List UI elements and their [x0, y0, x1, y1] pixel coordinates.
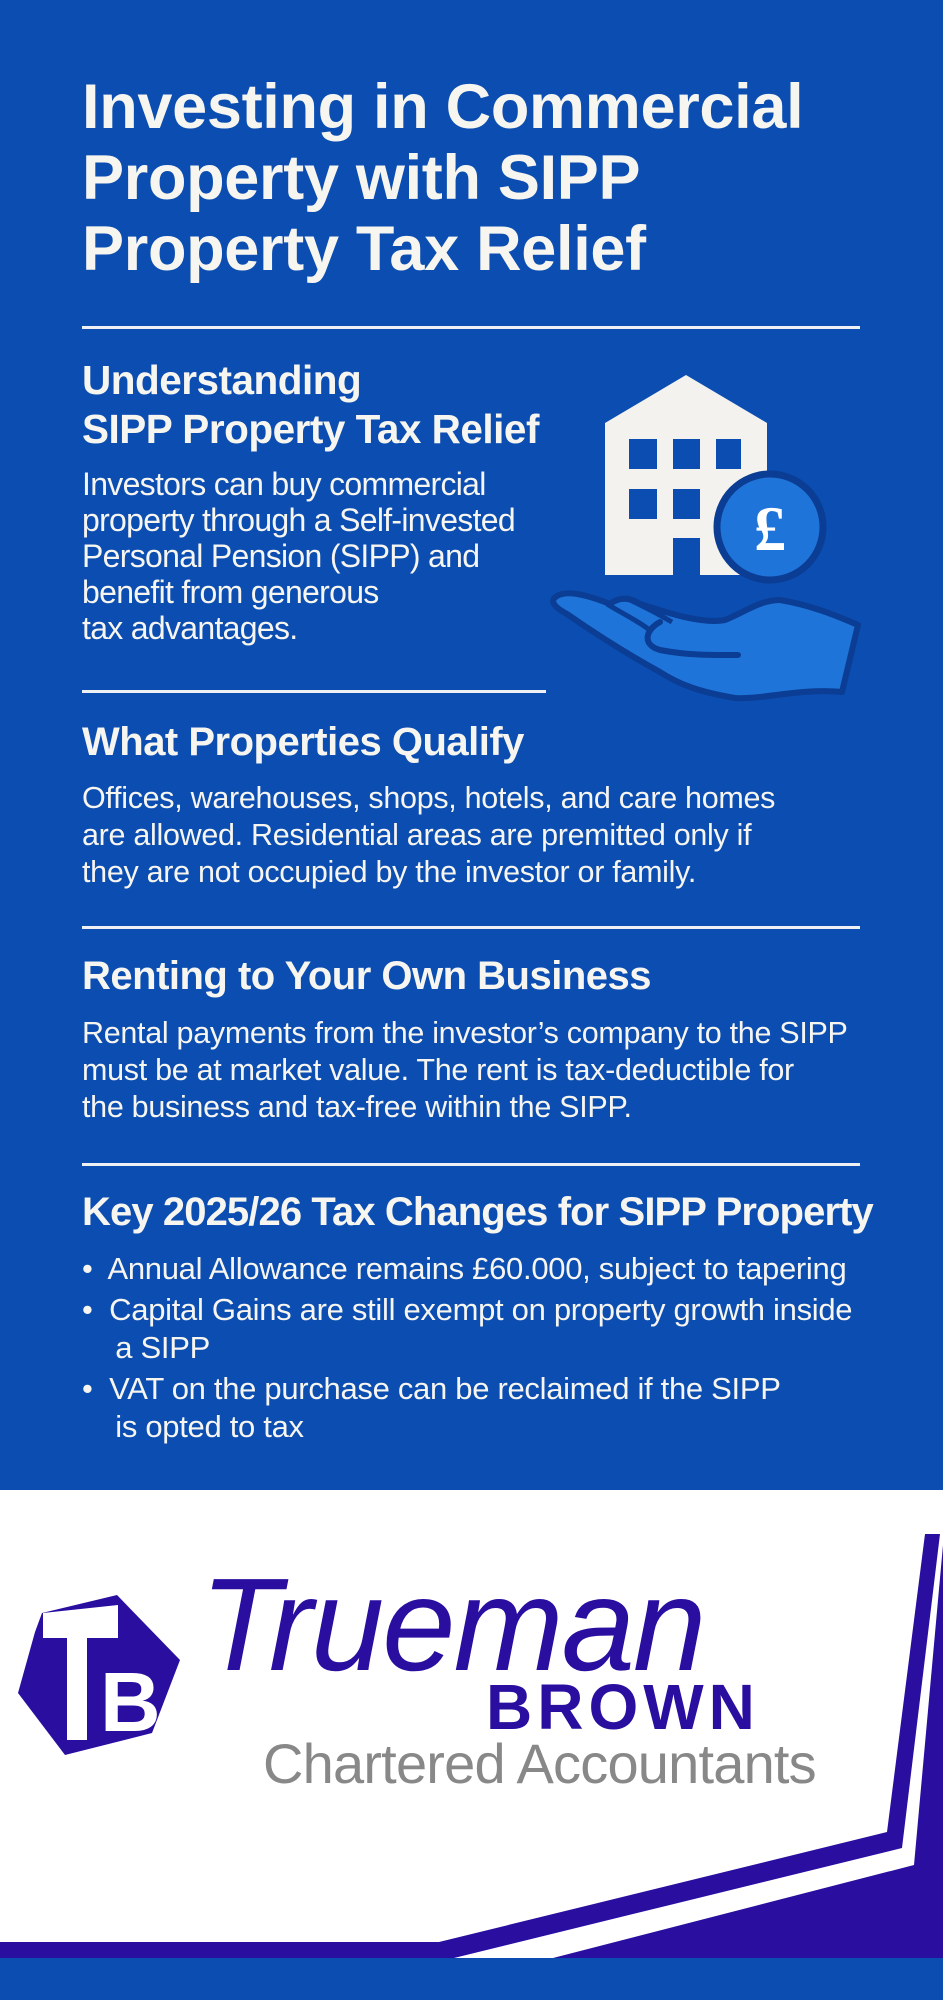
list: tax changes: • Capital Gains are still exempt on property growth inside — [82, 1292, 852, 1327]
text: renting: must be at market value. The rent is tax-deductible for — [82, 1053, 794, 1087]
text: properties: Offices, warehouses, shops, hotels, and care homes — [82, 781, 775, 815]
footer bar — [0, 1958, 943, 2000]
text: understanding — [82, 466, 515, 646]
title — [82, 72, 803, 284]
list: tax changes: • VAT on the purchase can be reclaimed if the SIPP — [82, 1371, 781, 1406]
list: tax changes: • Annual Allowance remains £60.000, subject to tapering — [82, 1251, 846, 1286]
text: understanding: Investors can buy commercial — [82, 466, 486, 502]
text: renting — [82, 1016, 848, 1124]
text: properties: are allowed. Residential areas are premitted only if — [82, 818, 751, 852]
icon: building — [605, 375, 767, 575]
icon: pound coin: £ — [754, 493, 786, 564]
text: BROWN: BROWN — [486, 1671, 760, 1743]
list: tax changes: is opted to tax — [115, 1409, 304, 1444]
heading: renting: Renting to Your Own Business — [82, 954, 651, 998]
text: understanding: tax advantages. — [82, 610, 297, 646]
icon: building on hand with pound coin — [550, 375, 861, 702]
text: Trueman: Trueman — [200, 1551, 704, 1698]
icon: TB hexagon — [18, 1595, 180, 1755]
text: properties: they are not occupied by the investor or family. — [82, 855, 696, 889]
text: properties — [82, 781, 775, 889]
text: renting: Rental payments from the investor’s company to the SIPP — [82, 1016, 848, 1050]
panel: blue background — [0, 0, 943, 1490]
heading: what properties qualify: What Properties Qualify — [82, 720, 524, 764]
text: understanding: Personal Pension (SIPP) and — [82, 538, 479, 574]
heading: understanding: SIPP Property Tax Relief — [82, 406, 539, 452]
icon: TB hexagon: B — [100, 1655, 161, 1749]
heading: understanding: Understanding — [82, 357, 361, 403]
heading: understanding — [82, 357, 540, 452]
title: Investing in Commercial — [82, 72, 803, 142]
heading: key tax changes: Key 2025/26 Tax Changes for SIPP Property — [82, 1190, 873, 1234]
decorative stripes — [0, 1534, 943, 1958]
title: Property with SIPP — [82, 143, 640, 213]
logo: Trueman Brown — [18, 1551, 816, 1795]
list: tax changes — [82, 1251, 852, 1444]
text: Chartered Accountants: Chartered Accountants — [263, 1732, 816, 1795]
icon: hand — [553, 593, 858, 698]
text: understanding: property through a Self-invested — [82, 502, 515, 538]
title: Property Tax Relief — [82, 214, 646, 284]
list: tax changes: a SIPP — [115, 1330, 210, 1365]
icon: pound coin — [717, 474, 823, 580]
text: renting: the business and tax-free within the SIPP. — [82, 1090, 632, 1124]
text: understanding: benefit from generous — [82, 574, 379, 610]
